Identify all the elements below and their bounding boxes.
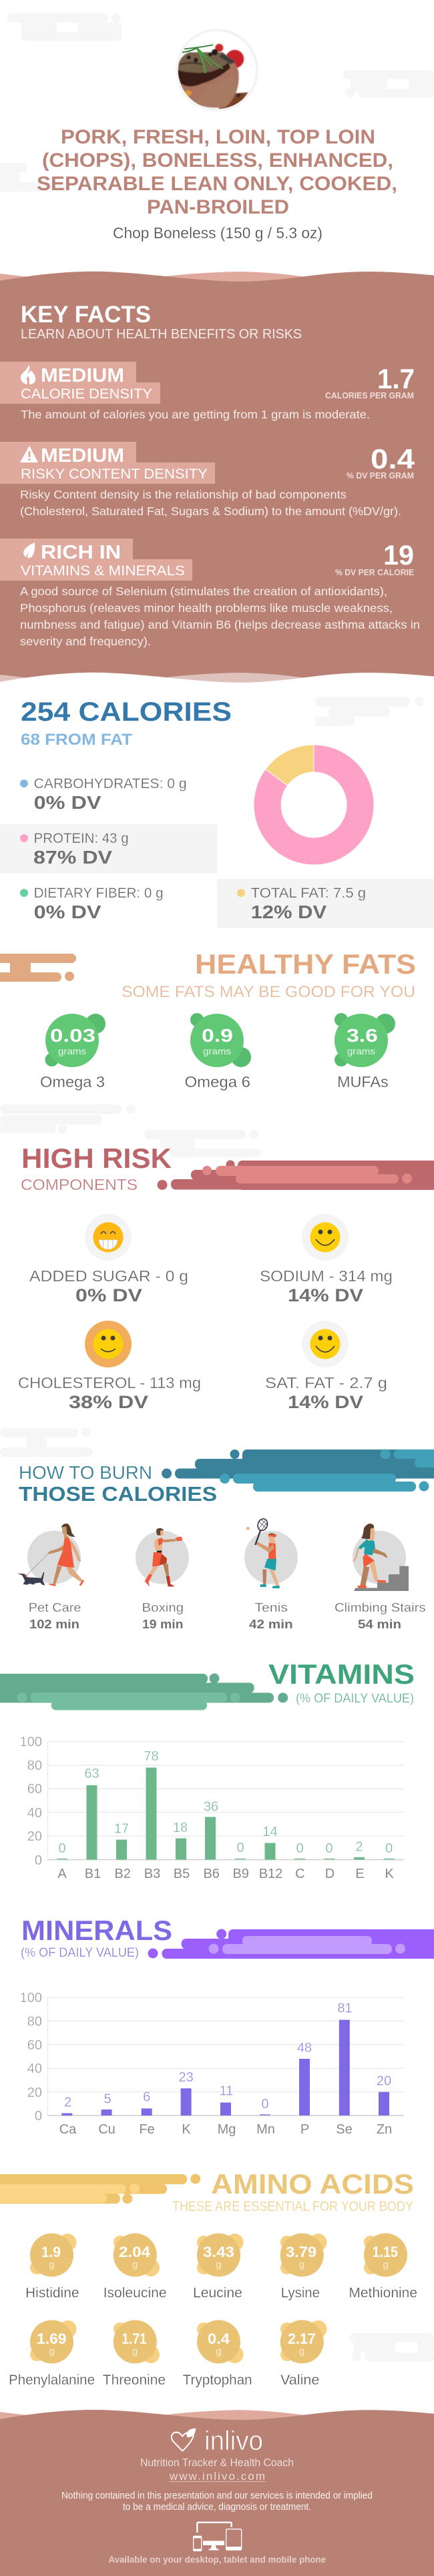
legend: total fat: TOTAL FAT: 7.5 g (251, 886, 366, 901)
panel: vitamins (0, 1658, 415, 1881)
activity: tennis (244, 1518, 298, 1631)
amino: isoleucine: 2.04 (119, 2244, 151, 2260)
availability note: Available on your desktop, tablet and mobile phone (108, 2554, 326, 2565)
bar chart: vitamins: 0 (325, 1841, 333, 1856)
legend: protein (0, 824, 218, 874)
legend: dietary fiber: DIETARY FIBER: 0 g (34, 886, 164, 901)
logo: inlivo (172, 2425, 263, 2456)
amino: leucine: 3.43 (203, 2244, 234, 2260)
subheading: LEARN ABOUT HEALTH BENEFITS OR RISKS (21, 327, 302, 342)
amino: isoleucine: g (132, 2259, 138, 2270)
bar chart: vitamins: B9 (232, 1867, 249, 1881)
bar chart: vitamins: 0 (296, 1841, 304, 1856)
legend: protein: 87% DV (33, 847, 112, 868)
amino: phenylalanine (9, 2320, 95, 2388)
activity: pet care: 102 min (29, 1618, 79, 1631)
bar chart: minerals: Fe (139, 2122, 155, 2137)
bar chart: minerals: Cu (98, 2122, 116, 2137)
donut chart (254, 745, 374, 865)
icon: warning triangle (20, 446, 38, 462)
bar chart: vitamins: 0 (58, 1841, 66, 1856)
bar chart: vitamins: 14 (262, 1825, 278, 1839)
disclaimer (61, 2491, 373, 2513)
fact: risky content density: RISKY CONTENT DENSITY (21, 466, 208, 482)
bar chart: vitamins (20, 1735, 404, 1881)
website: www.inlivo.com (169, 2470, 265, 2483)
fact: calorie density (0, 362, 415, 421)
component: sodium: SODIUM - 314 mg (260, 1267, 393, 1285)
legend: carbohydrates (20, 776, 187, 813)
title: PAN-BROILED (147, 196, 289, 218)
bar chart: minerals: 11 (220, 2083, 233, 2098)
activity: climbing stairs: Climbing Stairs (335, 1601, 426, 1614)
fact: calorie density: CALORIE DENSITY (21, 386, 152, 402)
legend: protein: PROTEIN: 43 g (34, 831, 129, 846)
fact: risky content density: % DV PER GRAM (347, 470, 414, 480)
fact: rich in vitamins and minerals: A good source of Selenium (stimulates the creation of antioxidants), (20, 585, 387, 598)
bar chart: minerals: P (300, 2122, 309, 2137)
bar chart: vitamins: 2 (355, 1839, 363, 1854)
bar chart: vitamins: 0 (385, 1841, 393, 1856)
bar chart: vitamins: D (325, 1867, 335, 1881)
activity: pet care (17, 1524, 84, 1631)
food image (177, 30, 257, 110)
subheading: components: COMPONENTS (21, 1176, 138, 1193)
amino: leucine: g (216, 2259, 222, 2270)
bar chart: vitamins: B6 (203, 1867, 220, 1881)
amino: histidine: 1.9 (41, 2244, 61, 2260)
fact: rich in vitamins and minerals (0, 539, 420, 648)
amino: threonine: g (132, 2346, 138, 2357)
legend: total fat: 12% DV (251, 902, 327, 922)
heading: amino acids: AMINO ACIDS (211, 2168, 414, 2200)
amino: valine: 2.17 (288, 2330, 316, 2347)
stat: omega 6 (184, 1013, 251, 1090)
fact: rich in vitamins and minerals: % DV PER CALORIE (335, 567, 414, 577)
serving size: Chop Boneless (150 g / 5.3 oz) (113, 224, 322, 242)
tagline: Nutrition Tracker & Health Coach (140, 2456, 294, 2469)
bar chart: vitamins: B1 (85, 1867, 101, 1881)
bar chart: vitamins: 0 (236, 1841, 244, 1855)
amino: phenylalanine: Phenylalanine (9, 2372, 95, 2388)
bar chart: minerals: 0 (35, 2109, 42, 2124)
component: added sugar: 0% DV (75, 1285, 142, 1305)
bar chart: vitamins: 20 (27, 1829, 42, 1844)
bar chart: minerals (20, 1991, 404, 2137)
panel: calories (0, 697, 434, 928)
heading: 254 calories: 254 CALORIES (21, 697, 232, 727)
bar chart: vitamins: A (57, 1867, 67, 1881)
bar chart: minerals: Se (336, 2122, 353, 2137)
bar chart: vitamins: B5 (174, 1867, 190, 1881)
legend: carbohydrates: 0% DV (34, 792, 101, 813)
panel: key facts (0, 272, 434, 687)
amino: methionine: Methionine (349, 2285, 417, 2301)
amino: phenylalanine: g (49, 2346, 55, 2357)
icon: leaf (23, 543, 35, 558)
amino: lysine: 3.79 (286, 2244, 316, 2260)
bar chart: vitamins: 40 (27, 1806, 42, 1821)
amino: phenylalanine: 1.69 (37, 2330, 67, 2347)
amino: methionine (349, 2233, 417, 2301)
activity: climbing stairs (335, 1524, 426, 1631)
amino: methionine: g (383, 2259, 389, 2270)
heading: high risk: HIGH RISK (21, 1143, 172, 1174)
bar chart: minerals: 81 (337, 2001, 353, 2016)
bar chart: vitamins: B12 (259, 1867, 282, 1881)
fact: risky content density: (Cholesterol, Saturated Fat, Sugars & Sodium) to the amount (%DV/gr). (20, 505, 401, 518)
bar chart: minerals: 23 (178, 2070, 194, 2085)
bar chart: vitamins: 17 (114, 1822, 129, 1837)
component: sodium: 14% DV (288, 1285, 363, 1305)
component: cholesterol (18, 1321, 201, 1412)
stat: omega 3: grams (58, 1046, 86, 1056)
panel: amino acids (0, 2168, 417, 2388)
bar chart: vitamins: 36 (204, 1799, 218, 1814)
fact: calorie density: MEDIUM (41, 365, 124, 386)
fact: risky content density (0, 442, 415, 518)
bar chart: vitamins: K (385, 1867, 394, 1881)
fact: risky content density: 0.4 (371, 443, 415, 474)
disclaimer: to be a medical advice, diagnosis or treatment. (123, 2502, 311, 2513)
bar chart: minerals: 6 (143, 2090, 150, 2105)
activity: tennis: Tenis (254, 1601, 288, 1614)
amino: threonine: Threonine (103, 2372, 166, 2388)
bar chart: minerals: 80 (27, 2014, 42, 2029)
title: (CHOPS), BONELESS, ENHANCED, (42, 149, 393, 172)
bar chart: minerals: 5 (103, 2091, 112, 2106)
logo: inlivo: inlivo (204, 2425, 263, 2456)
heading: minerals: MINERALS (21, 1915, 172, 1946)
bar chart: vitamins: E (355, 1867, 365, 1881)
fact: rich in vitamins and minerals: Phosphorus (releaves minor health problems like muscle weakness, (20, 601, 393, 615)
bar chart: minerals: 20 (377, 2074, 391, 2089)
bar chart: minerals: 2 (64, 2096, 71, 2110)
stat: MUFAs: 3.6 (347, 1025, 378, 1046)
amino: lysine: g (299, 2259, 304, 2270)
heading: those calories: THOSE CALORIES (19, 1482, 217, 1506)
amino: tryptophan: Tryptophan (183, 2372, 252, 2388)
panel: minerals (20, 1915, 434, 2137)
fact: rich in vitamins and minerals: RICH IN (41, 542, 121, 563)
panel: high risk components (18, 1143, 434, 1412)
bar chart: minerals: 20 (27, 2085, 42, 2100)
fact: rich in vitamins and minerals: numbness and fatigue) and Vitamin B6 (helps decrease asthma attacks in (20, 618, 420, 631)
bar chart: vitamins: C (295, 1867, 305, 1881)
bar chart: minerals: 100 (20, 1991, 42, 2005)
fact: rich in vitamins and minerals: VITAMINS & MINERALS (21, 563, 185, 579)
amino: histidine: g (49, 2259, 55, 2270)
amino: isoleucine (103, 2233, 167, 2301)
bar chart: vitamins: B3 (144, 1867, 160, 1881)
activity: climbing stairs: 54 min (358, 1618, 401, 1631)
activity: tennis: 42 min (249, 1618, 293, 1631)
bar chart: minerals: Ca (59, 2122, 77, 2137)
disclaimer: Nothing contained in this presentation and our services is intended or implied (61, 2491, 373, 2501)
amino: valine: g (299, 2346, 304, 2357)
component: saturated fat (265, 1321, 387, 1412)
bar chart: minerals: K (182, 2122, 191, 2137)
stat: omega 6: grams (203, 1046, 231, 1056)
stat: omega 3 (40, 1014, 105, 1090)
legend: carbohydrates: CARBOHYDRATES: 0 g (34, 776, 187, 791)
bar chart: vitamins: 18 (173, 1821, 188, 1835)
amino: threonine (103, 2320, 166, 2388)
bar chart: minerals: Mn (256, 2122, 275, 2137)
bar chart: minerals: Mg (218, 2122, 236, 2137)
fact: calorie density: CALORIES PER GRAM (325, 390, 414, 400)
title: SEPARABLE LEAN ONLY, COOKED, (37, 173, 397, 195)
component: cholesterol: 38% DV (69, 1392, 148, 1412)
fact: risky content density: MEDIUM (41, 445, 124, 466)
component: cholesterol: CHOLESTEROL - 113 mg (18, 1374, 201, 1391)
bar chart: vitamins: 60 (27, 1782, 42, 1797)
legend: total fat (217, 879, 434, 928)
bar chart: vitamins: 100 (20, 1735, 42, 1750)
activity: boxing (136, 1528, 189, 1631)
bar chart: vitamins: 80 (27, 1758, 42, 1773)
icon: flame (21, 365, 35, 384)
amino: tryptophan: 0.4 (208, 2330, 230, 2347)
amino: histidine: Histidine (25, 2285, 79, 2301)
fact: rich in vitamins and minerals: severity and frequency). (20, 635, 151, 648)
amino: tryptophan: g (216, 2346, 222, 2357)
stat: MUFAs: grams (347, 1046, 375, 1056)
legend: dietary fiber (20, 886, 164, 922)
stat: omega 3: 0.03 (50, 1025, 95, 1046)
fact: calorie density: 1.7 (377, 363, 415, 394)
activity: pet care: Pet Care (29, 1601, 81, 1614)
panel: footer (0, 2410, 434, 2576)
amino: lysine: Lysine (281, 2285, 320, 2301)
component: sodium (260, 1214, 393, 1305)
subheading: percent of daily value: (% OF DAILY VALUE) (21, 1946, 139, 1960)
amino: isoleucine: Isoleucine (103, 2285, 167, 2301)
stat: omega 3: Omega 3 (40, 1073, 105, 1090)
subheading: from fat: 68 FROM FAT (21, 731, 132, 749)
subheading: SOME FATS MAY BE GOOD FOR YOU (122, 983, 415, 1001)
fact: rich in vitamins and minerals: 19 (383, 539, 414, 571)
amino: lysine (280, 2233, 327, 2301)
component: added sugar (29, 1214, 188, 1305)
bar chart: minerals: 0 (261, 2097, 269, 2112)
bar chart: minerals: Zn (377, 2122, 392, 2137)
title: PORK, FRESH, LOIN, TOP LOIN (61, 126, 375, 148)
amino: valine (280, 2320, 327, 2388)
stat: omega 6: 0.9 (202, 1025, 233, 1046)
legend: dietary fiber: 0% DV (34, 902, 101, 922)
icon: devices (194, 2523, 242, 2551)
activity: boxing: 19 min (142, 1618, 183, 1631)
amino: histidine (25, 2233, 79, 2301)
stat: MUFAs: MUFAs (337, 1073, 389, 1090)
panel: healthy fats (0, 948, 416, 1090)
title (37, 126, 397, 218)
heading: vitamins: VITAMINS (268, 1658, 415, 1690)
amino: tryptophan (183, 2320, 252, 2388)
heading: how to burn: HOW TO BURN (19, 1462, 152, 1483)
amino: threonine: 1.71 (122, 2330, 147, 2347)
heading: key facts: KEY FACTS (21, 302, 151, 328)
bar chart: minerals: 40 (27, 2061, 42, 2076)
bar chart: vitamins: B2 (114, 1867, 131, 1881)
subheading: percent of daily value: (% OF DAILY VALUE) (296, 1692, 414, 1706)
component: saturated fat: 14% DV (288, 1392, 363, 1412)
fact: risky content density: Risky Content density is the relationship of bad components (20, 488, 347, 501)
amino: methionine: 1.15 (373, 2244, 398, 2260)
amino: leucine: Leucine (193, 2285, 242, 2301)
amino: valine: Valine (280, 2372, 319, 2388)
stat: omega 6: Omega 6 (184, 1073, 250, 1090)
component: saturated fat: SAT. FAT - 2.7 g (265, 1374, 387, 1391)
bar chart: minerals: 60 (27, 2038, 42, 2053)
bar chart: minerals: 48 (297, 2041, 312, 2055)
amino: leucine (193, 2233, 243, 2301)
bar chart: vitamins: 0 (35, 1853, 42, 1868)
stat: MUFAs (335, 1013, 395, 1090)
heading: healthy fats: HEALTHY FATS (195, 948, 416, 980)
panel: how to burn those calories (17, 1450, 434, 1631)
activity: boxing: Boxing (142, 1601, 184, 1614)
component: added sugar: ADDED SUGAR - 0 g (29, 1267, 188, 1285)
bar chart: vitamins: 63 (84, 1766, 99, 1781)
bar chart: vitamins: 78 (144, 1749, 159, 1764)
fact: calorie density: The amount of calories you are getting from 1 gram is moderate. (21, 408, 370, 421)
